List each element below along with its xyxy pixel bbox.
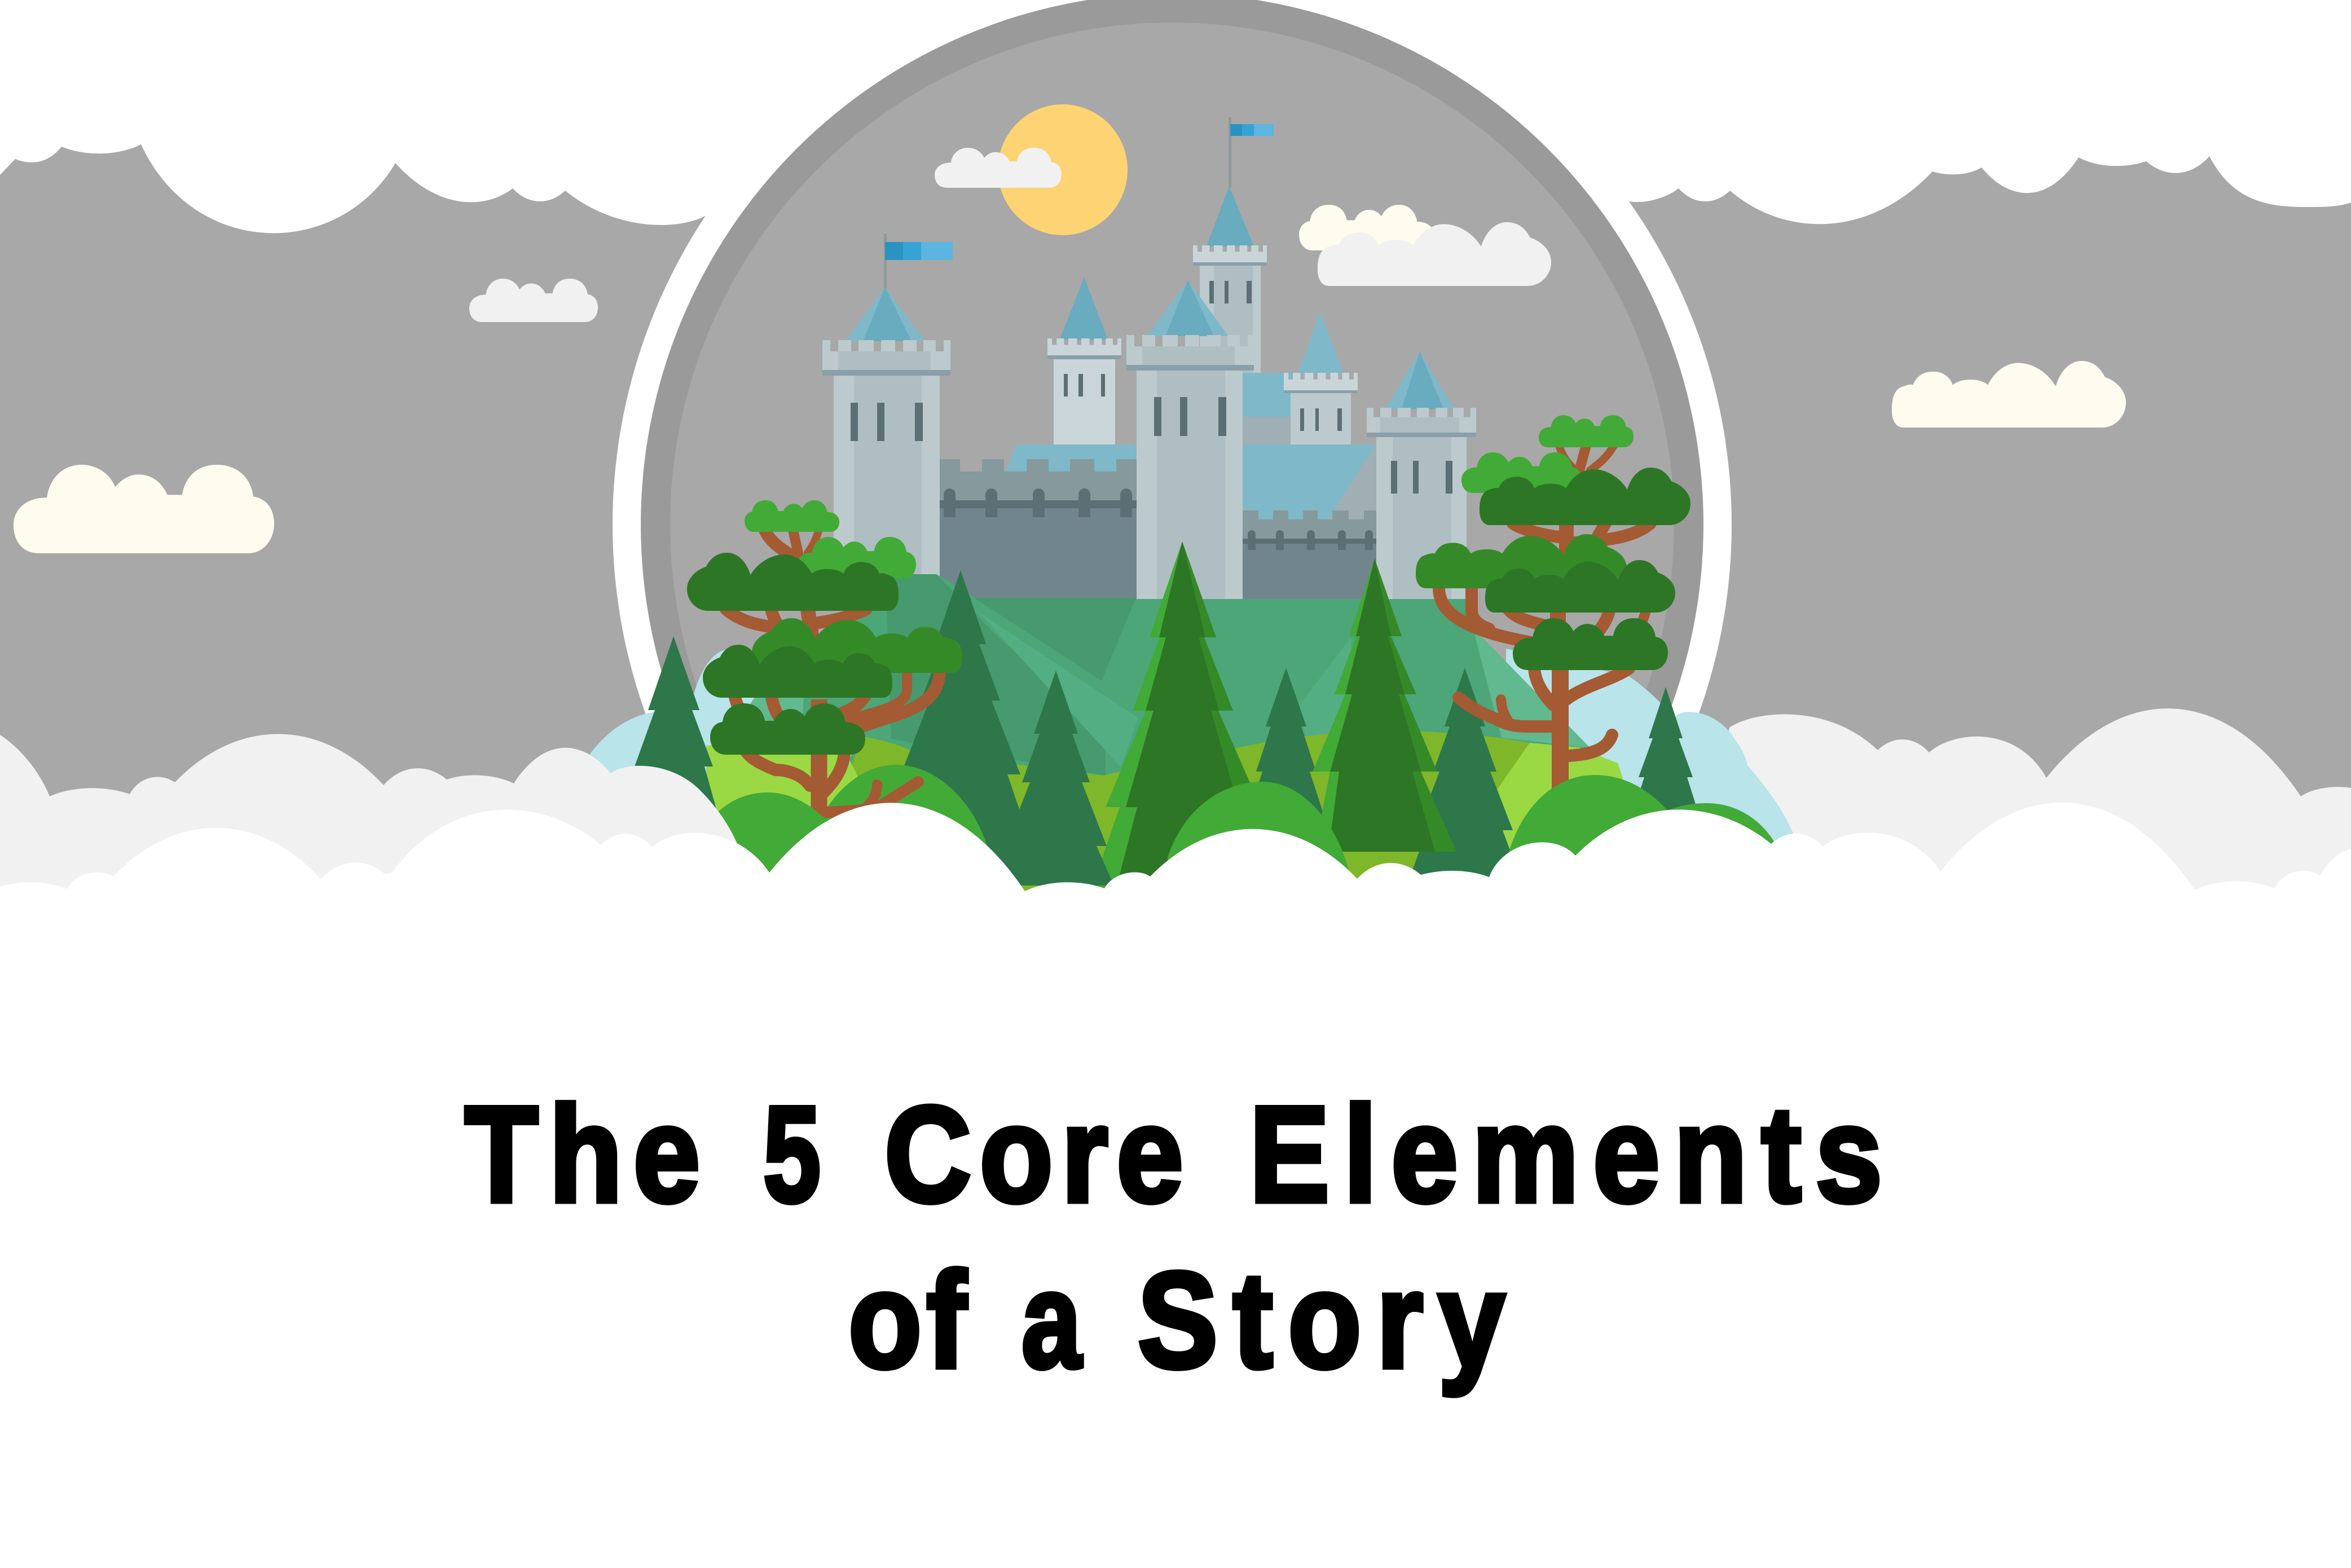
light blue hills xyxy=(587,649,1800,931)
title: 5 xyxy=(763,1078,821,1231)
cloud: big white xyxy=(1318,222,1551,286)
right tree branches xyxy=(1439,446,1650,801)
back tall tower with flag xyxy=(1193,117,1274,378)
castle xyxy=(822,117,1476,601)
umbrella tree: left xyxy=(687,500,962,818)
right tree canopy 2 xyxy=(1461,452,1582,493)
left tree canopy 3 xyxy=(687,553,899,611)
front white cloud band xyxy=(0,803,2351,1568)
title: Core xyxy=(884,1078,1183,1231)
title: Story xyxy=(1138,1244,1505,1397)
left wall with roof and rail xyxy=(940,444,1137,601)
pine: centre tallest xyxy=(1089,541,1276,897)
right small tower xyxy=(1284,312,1358,444)
castle hill xyxy=(733,574,1590,818)
porthole ring and inner sky xyxy=(613,0,1732,1084)
bush: centre xyxy=(1168,782,1351,902)
right tree canopy 5 xyxy=(1485,560,1675,613)
pine trees, back row xyxy=(612,570,1703,886)
centre-left small tower xyxy=(1047,277,1121,445)
right tree canopy 4 xyxy=(1416,534,1627,588)
left tree canopy 4 xyxy=(752,618,962,673)
left tree canopy 6 xyxy=(710,703,865,755)
title: Elements xyxy=(1249,1078,1882,1231)
cloud: over the sun xyxy=(935,148,1062,188)
forest scene xyxy=(587,415,1800,931)
bush: left front xyxy=(717,792,835,902)
blue back wall xyxy=(1243,373,1293,444)
cloud: cream right xyxy=(1892,361,2126,428)
bushes behind trees xyxy=(818,765,1777,902)
title: of xyxy=(848,1244,967,1397)
title: a xyxy=(1022,1244,1082,1397)
left tree canopy 1 xyxy=(745,500,839,532)
right tree canopy 1 xyxy=(1539,415,1634,447)
sky background xyxy=(0,113,2351,959)
left tree canopy 5 xyxy=(703,645,892,698)
right tree canopy 3 xyxy=(1480,468,1690,525)
left tree branches xyxy=(726,530,940,818)
right tree canopy 6 xyxy=(1513,618,1668,670)
central tower xyxy=(1126,280,1254,601)
pine: right centre tall xyxy=(1313,558,1456,852)
sun xyxy=(998,104,1128,235)
pine: front small centre xyxy=(998,671,1114,886)
right tower xyxy=(1367,351,1476,601)
bush: right front xyxy=(1506,775,1678,902)
umbrella tree: right xyxy=(1416,415,1690,801)
left tree canopy 2 xyxy=(797,537,916,579)
right wall with roof and rail xyxy=(1243,444,1376,601)
title xyxy=(465,1078,1882,1397)
title: The xyxy=(465,1078,700,1231)
top white cloud band xyxy=(0,0,2351,233)
cloud: small grey left xyxy=(469,279,598,322)
left tower with flag xyxy=(822,234,953,601)
left grey cloud layer xyxy=(0,734,750,931)
cloud: cream behind big cloud xyxy=(1299,205,1434,250)
right grey cloud layer xyxy=(1692,708,2351,931)
cloud: cream left xyxy=(14,465,274,553)
grass hills xyxy=(706,731,1664,902)
